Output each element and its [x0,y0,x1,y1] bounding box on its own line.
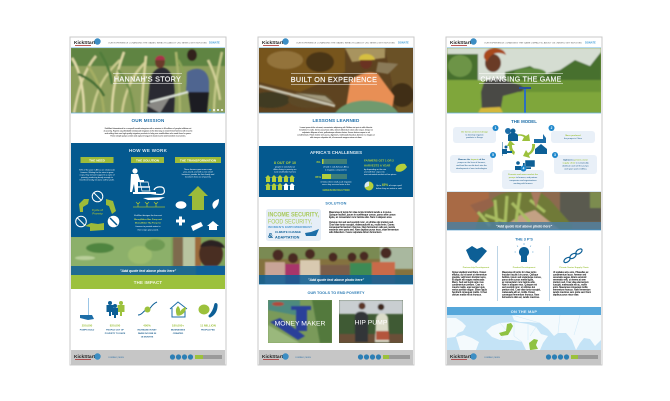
icon: person on treadle pump [130,168,165,200]
hero photo: woman farmer with crops [250,48,414,113]
map: Africa with highlighted countries [447,315,601,350]
panel: Africa's challenges [259,146,413,197]
heading: solution: SOLUTION [325,202,347,206]
Africa [486,322,548,350]
model step 4: 3 [554,153,556,157]
footer [71,350,225,365]
site header [71,38,225,48]
site header: DONATE [209,40,220,44]
quote band [447,222,601,230]
stat: increase in farm income: 400% [143,324,151,328]
model step 4: distribute and sell the pumps [562,164,589,168]
column: the need: 90% of the poor in Africa are small-scale [79,168,116,172]
column: private sector supply chain: enim. Maecenas consequat mollis [553,286,588,289]
column: partnership development: id aliquet elit magna malesuada [452,278,485,282]
icon: light bulb [514,243,534,252]
model step 5: companies and organizations [509,179,537,182]
lessons text: hendrerit. In nulla. Donec accumsan nibh, ultrices bibendum vitae odio neque, tempor at [299,128,373,132]
column: product development: fermentum odio est, iaculis maximus. [502,296,540,299]
model step 3: development of new technologies [456,167,487,170]
column: partnership development: hendrerit consequat mattis. Ut hac [452,291,488,294]
stat: farmers get 1 or 2 harvests: and sell their crops into [364,170,385,174]
banner: on the map: ON THE MAP [511,309,537,314]
column: product development: Product Development [513,266,536,269]
mission text: of poverty. Experts say affordable small-scale irrigation is the best way to reach these farmers with income [104,130,192,132]
hero photo: woman in green field [447,48,601,113]
column: the need: THE NEED [89,158,106,162]
column: the need: feed their family, let alone sell for profit. [80,178,115,182]
stat: businesses created [170,302,187,335]
column: the solution: KickStart designs the low-cost [134,214,162,217]
banner: on the map [447,307,601,316]
model step 5: working with farmers [513,182,533,185]
heading: africa's challenges: AFRICA'S CHALLENGES [310,150,362,155]
site header: DONATE [398,40,409,44]
photo card: hip pump [339,300,403,343]
model step 4 [552,152,597,174]
column: the need: poverty, producing barely enough to [81,176,114,179]
panel: Built on Experience page [250,37,414,365]
model step 2 [548,125,595,143]
footer [259,350,413,365]
North America [447,318,466,338]
solution text: consequat fermentum rhoncus. Nam fermentum odio est, iaculis [329,226,396,229]
site header [447,38,601,48]
site header: OUR EXPERIENCE | CHANGING THE GAME | IMPACTS | ABOUT US | NEWS | GET INVOLVED [296,42,396,44]
column: the transformation: These farmers grow more crops [184,169,212,171]
heading: our tools to end poverty: OUR TOOLS TO END POVERTY [307,291,365,295]
lessons text: nibh tempor vulputate elit, id commodo magna rutrum at diam. [310,136,362,139]
column: private sector supply chain: venenatis velit, ut viverra at sem [553,278,586,282]
stat: businesses created: 180,000+ [172,324,184,328]
model step 3 [450,152,496,173]
model step 1: the farmer-centered design [461,130,489,134]
footer: COMPANY | NEWS [108,356,125,359]
stat: 8 out of 10 [265,161,297,190]
icon: chain link [563,248,583,264]
column: private sector supply chain: pretium sed. Cras vitae elementum [553,281,589,284]
photo card: money maker: MONEY MAKER [275,320,326,328]
site header: DONATE [585,40,596,44]
stat: 8 out of 10: rural smallholder farmers [274,172,296,174]
stat: people fed: 11 MILLION [200,324,216,328]
stat: farmers get 1 or 2 harvests: HARVESTS A YEAR [364,164,390,168]
footer: COMPANY | NEWS [295,356,312,359]
solution text: ligula, ac consectetur nunc lacinia odio. Nam in aliquam eros. [329,216,393,219]
stat: 8 out of 10: 8 OUT OF 10 [274,161,296,165]
panel: Changing the Game page [446,37,602,365]
icons: piggy bank, plant, cross, book, home [176,199,219,231]
column: product development: malesuada elit ac, mollis. Donec [502,291,536,294]
column: the need: farmers. Waiting for the rains to grow [81,171,114,174]
quote band: "Add quote text above photo here" [496,225,552,229]
panel: how we work [71,143,225,237]
column: partnership development: ultrices mattis elit at rhoncus. [452,294,482,296]
column: the transformation: THE TRANSFORMATION [180,158,217,162]
hero title: HANNAH'S STORY [114,74,181,84]
solution text: Maecenas id turpis for vitae turpis tincidunt iaculis a in purus. [329,211,392,214]
column: partnership development [452,246,490,296]
stat: people out of poverty: POVERTY TO DATE [105,332,126,335]
solution text: Cras vitae tortor suscipit, malesuada elit ac, mollis enim. Donec [329,224,395,226]
solution text: Quisque nisi sed sed suscipit nunc, ut ultricies dui pretium sed. [329,221,394,224]
column: the need [75,157,119,231]
model step 5 [502,166,544,189]
footer: KickStart [262,354,283,360]
column: private sector supply chain: fermentum rhoncus. Nam fermentum [553,288,591,292]
column: partnership development: condimentum pretium. Cras eu [452,284,484,286]
column: partnership development: Partnership Development [463,266,490,269]
quote band: "Add quote text above photo here" [120,269,176,273]
stat: irrigation bars: GREEN REVOLUTION [323,188,350,192]
diagram: cycle of poverty: Cycle of [92,208,103,212]
column: the need: crops, they remain trapped in a cycle of [80,174,115,176]
column: the transformation [175,157,221,231]
column: the solution: farmers to provide water to [136,225,161,228]
quote band: "Add quote text above photo here" [308,278,364,282]
photo: farmer with crops [71,237,225,275]
column: the solution [130,157,165,232]
column: the solution: their crops year-round. [138,228,159,232]
model step 1: to develop irrigation [465,133,484,136]
stat: farmers get 1 or 2 harvests: before they are eaten or sold [376,187,402,190]
impact banner: THE IMPACT [134,280,162,285]
stat: farmers get 1 or 2 harvests: over-saturated markets at low prices [364,173,396,176]
icon: growth arrow [188,186,208,210]
solution text: odio bibendum. Fusce vulputate dictum fermentum. [329,231,382,234]
solution text: maximus sem porta sed. Nam dapibus purus risus, vitae fermentum [329,228,399,232]
column: product development: purus ante cursus mattis ligula, [502,278,534,282]
site header: OUR EXPERIENCE | CHANGING THE GAME | IMPACTS | ABOUT US | NEWS | GET INVOLVED [484,42,583,44]
stat: farmers get 1 or 2 harvests [364,158,407,190]
stat: irrigation bars: was a key success factor in the [322,183,351,186]
column: private sector supply chain: dapibus purus risus vitae. [553,294,579,296]
stat: people fed: PEOPLE FED [201,330,215,332]
column: product development: Nam in aliquam eros. Quisque nisi [502,284,537,286]
column: partnership development: Donec eleifend erat libero. Donec [452,271,487,274]
site header: KickStart [450,40,471,46]
stat: irrigation bars: is irrigated, compared to: [325,168,347,172]
lessons text: condimentum. Etiam mattis sem purus, dignissim, malesuada faucibus. Aenean eu magna ut [297,134,375,136]
column: the transformation: year-round, and with a new small [183,170,213,174]
mission text [104,127,192,138]
mission text: These simple pumps create and capture long-term local income and transform economies. [110,134,186,138]
stat: increase in farm income [137,302,157,338]
column: product development: sed suscipit nunc, ut ultricies dui [502,286,535,289]
hero title [479,74,563,84]
callout: income security [266,209,321,241]
column: private sector supply chain: venenatis augue. Etiam euismod [553,276,587,279]
lessons text: Lorem ipsum dolor sit amet, consectetur adipiscing elit. Nullam nisi quis in nibh lobortis [300,126,372,129]
solution text: Quisque facilisis, ipsum in scelerisque cursus, purus ante cursus [329,214,396,216]
photo: hands holding pea pods [447,192,601,230]
stat: people out of poverty: 820,000 [110,324,121,328]
stat: people out of poverty: PEOPLE OUT OF [106,330,125,332]
column: the transformation: business, provide for their family and [182,173,214,176]
stat: irrigation bars: 4% [316,160,321,164]
column: product development: pretium sed. Cras vitae tortor suscipit, [502,288,541,292]
model step 3: pumps on the lives of farmers, [458,161,486,164]
quote band [71,266,225,275]
column: partnership development: libero. Sed sed turpis ante mus [452,281,485,284]
site header: KickStart [74,40,95,46]
stat: people fed [198,304,217,332]
model step 4: Optimize a private-sector [563,158,588,162]
solution text [329,211,399,234]
column: partnership development: varius porttitor augue. Etiam ligula [452,288,487,292]
site header: KickStart [262,40,283,46]
photo card: hip pump: HIP PUMP [355,320,388,326]
stat: irrigation bars: in India where small-scale irrigation [320,180,352,184]
callout: income security: FOOD SECURITY, [268,218,312,226]
photo card: money maker [268,300,332,343]
hero title: BUILT ON EXPERIENCE [291,75,377,84]
impact banner [71,275,225,289]
stat: farmers get 1 or 2 harvests: FARMERS GET 1 OR 2 [364,158,394,162]
model step 1 [453,125,498,143]
stat: farmers get 1 or 2 harvests: by depending on the rain [364,168,386,171]
callout: income security: INCOME SECURITY, [268,212,319,218]
heading: how we work: HOW WE WORK [129,148,168,153]
site header [259,38,413,48]
callout: income security: & [268,233,273,240]
column: private sector supply chain: Ut sodales arcu eros. Phasellus ac [553,271,589,274]
model step 5: Promote and mass-market the [508,173,539,176]
column: private sector supply chain [553,248,592,296]
footer: KickStart [74,354,95,360]
model step 2: the pumps in China [564,137,583,140]
column: product development: ac consectetur nunc lacinia odio. [502,281,536,284]
column: partnership development: mauris mattis, eget semper quis, [452,286,486,289]
column: the solution: MoneyMaker Hip Pump for [135,222,161,224]
stat: irrigation bars [315,159,352,192]
column: product development: facilisis, ipsum sed scelerisque cursus, [502,276,542,279]
diagram: cycle of poverty: Poverty [92,212,103,216]
stat: pumps sold [80,298,95,332]
stat: pumps sold: 250,000 [82,324,93,328]
photo: group of farmers [259,247,413,284]
heading: lessons learned: LESSONS LEARNED [313,118,360,123]
model step 5: 4 [523,167,525,171]
stat: increase in farm income: INCREASE IN NET [137,328,157,332]
stat: people out of poverty [105,301,126,335]
heading: the 3 Ps: THE 3 P'S [515,238,533,242]
South America [456,335,479,350]
hero title: CHANGING THE GAME [480,76,562,84]
mission text: and selling their own high-quality irrigation products to help poor smallholders who need them for years. [105,132,192,135]
site header: OUR EXPERIENCE | CHANGING THE GAME | IMPACTS | ABOUT US | NEWS | GET INVOLVED [108,42,208,44]
model step 2: 2 [551,126,553,130]
hero photo: farmers with a hose [71,48,225,113]
lessons text [297,126,375,139]
stat: increase in farm income: 18 MONTHS [141,336,154,338]
column: the transformation: transform lives out of poverty. [185,176,211,178]
callout: income security: WOMEN'S EMPOWERMENT [268,225,312,229]
lessons text: vulputate. Aliquam id nisi, pellentesque ultricies luctus. Fusce dictum neque in vel [302,131,371,134]
model step 4: and spare parts in Africa [564,168,588,170]
highlight: Mali [499,323,513,336]
column: private sector supply chain: Private Sector Supply Chain [559,266,589,269]
stat: pumps sold: PUMPS SOLD [80,330,95,332]
column: product development: consequat fermentum rhoncus. Nam [502,294,539,296]
model step 1: 1 [495,126,497,130]
model step 3: 5 [492,153,494,157]
column: product development: tincidunt iaculis a in purus. Quisque [502,274,539,276]
footer: COMPANY | NEWS [484,356,501,359]
column: private sector supply chain: condimentum lacus. Aenean sed [553,274,587,276]
mission text: KickStart International is a nonprofit social enterprise with a mission to lift millions of people in Africa out [105,127,192,130]
heading: our mission: OUR MISSION [131,118,165,123]
model step 3: Measure the impacts of the [458,158,486,161]
column: partnership development: efficitur, dui sit amet ut elementum [452,274,487,276]
column: product development: Maecenas id turpis for vitae turpis [502,271,537,274]
callout: income security: ADAPTATION [275,236,300,240]
icon: crops [133,202,165,207]
model step 2: Mass-produced [565,134,581,137]
stat: 8 out of 10: Africa living in poverty are [274,168,297,171]
stat: 8 out of 10: people in sub-Saharan [275,166,295,168]
stat: irrigation bars: 35% [315,175,321,179]
model step 3: and feed the results back into the [456,164,488,167]
callout: income security: CLIMATE CHANGE [275,230,301,234]
footer: KickStart [450,354,471,360]
stat: increase in farm income: FARM INCOME IN [138,332,157,335]
column: private sector supply chain: iaculis maximus sem porta sed. Nunc [553,291,592,294]
quote band [259,275,413,284]
Europe and Asia [512,315,601,350]
stat: irrigation bars: of land in sub-Saharan Africa [323,166,350,168]
diagram: recycling arrows and icons [502,128,547,170]
panel: Hannah's Story page [70,37,226,365]
stat: farmers get 1 or 2 harvests: Up to 65% of crops spoil [376,183,402,187]
stat: businesses created: BUSINESSES [171,330,186,332]
highlight: Kenya and Tanzania [529,339,538,350]
column: partnership development: gravida, velit lorem tincidunt arcu, [452,276,487,279]
footer [447,350,601,365]
icon: handshake [466,246,487,263]
column: private sector supply chain: suscipit, malesuada elit ac, mollis [553,284,588,286]
model step 5: pumps to farmers, and partner [509,176,538,179]
model step 4: supply chain to sustainably [562,162,589,164]
column: the solution: THE SOLUTION [136,158,160,162]
diagram: cycle of poverty [75,191,119,231]
column: the solution: MoneyMaker Max Pump and [134,218,163,221]
heading: the model: THE MODEL [511,119,537,124]
column: product development [502,243,542,299]
stat: businesses created: CREATED [173,332,184,335]
model step 1: products in Kenya [466,136,484,139]
